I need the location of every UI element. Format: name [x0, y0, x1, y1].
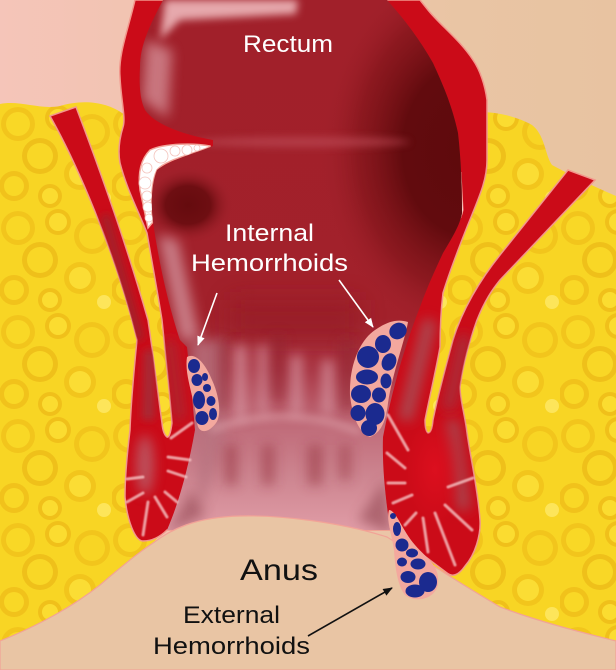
- arrow: external: [308, 588, 392, 636]
- label: Rectum: Rectum: [243, 31, 333, 58]
- label: Internal Hemorrhoids: Hemorrhoids: [191, 250, 348, 277]
- rectal wall and sphincter muscle: [50, 0, 595, 575]
- muscle shading: [105, 215, 470, 530]
- right fat tissue: [400, 112, 616, 650]
- arrow: internal left: [198, 293, 217, 345]
- pink left edge: [142, 40, 172, 118]
- left fat tissue: [0, 102, 205, 650]
- label: Internal Hemorrhoids: [191, 220, 348, 277]
- funnel bottom corners: [167, 491, 208, 530]
- dark left pocket: [152, 174, 224, 236]
- label: Anus: Anus: [240, 554, 318, 587]
- label: External Hemorrhoids: [153, 602, 310, 660]
- label: External Hemorrhoids: External: [183, 602, 280, 629]
- left internal hemorrhoids: [186, 356, 219, 431]
- white fibres in muscle: [127, 415, 473, 565]
- rectum interior: [140, 0, 462, 530]
- arrow: internal right: [339, 280, 373, 327]
- right internal hemorrhoids: [350, 319, 410, 439]
- dark right shading: [344, 16, 462, 300]
- pink top highlight: [160, 0, 298, 40]
- subcutaneous fat under fold: [139, 144, 463, 228]
- label: Internal Hemorrhoids: Internal: [225, 220, 314, 247]
- vertical folds: [233, 345, 334, 420]
- external hemorrhoids: [388, 510, 438, 599]
- upper funnel darkness: [238, 313, 350, 337]
- perineal skin and anus: [0, 516, 616, 670]
- label: External Hemorrhoids: Hemorrhoids: [153, 633, 310, 660]
- funnel sides: [190, 340, 225, 510]
- horizontal fold highlight: [190, 137, 410, 147]
